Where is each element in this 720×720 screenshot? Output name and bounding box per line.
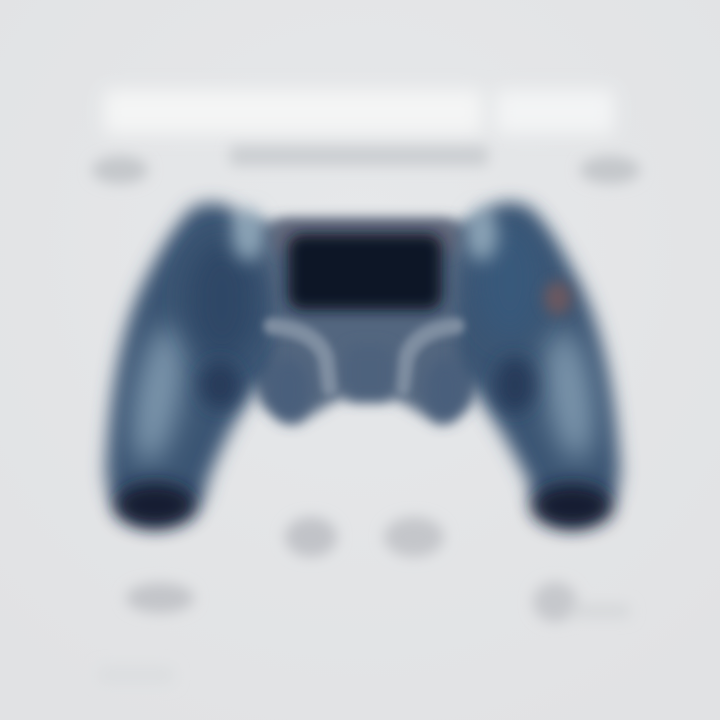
- label: lower centre right: [384, 517, 444, 557]
- label: top left: [92, 156, 148, 184]
- subtitle: [230, 146, 488, 166]
- left thumbstick: [267, 358, 309, 422]
- centre panel: [345, 345, 393, 401]
- left stick housing: [272, 326, 330, 388]
- right thumbstick: [425, 358, 467, 422]
- label: bottom right: [533, 582, 630, 622]
- title: [104, 90, 614, 134]
- right grip: [458, 203, 620, 528]
- label: top right: [580, 156, 640, 184]
- red button accent: [544, 281, 572, 315]
- grip highlight: upper right: [466, 209, 498, 261]
- label: bottom left: [126, 583, 194, 613]
- label: lower centre left: [285, 517, 337, 557]
- left grip: [106, 203, 272, 527]
- touchpad: [274, 220, 456, 310]
- controller body: [240, 222, 490, 424]
- right stick housing: [402, 326, 456, 388]
- grip highlight: upper left: [232, 209, 264, 261]
- footer note: [98, 666, 174, 684]
- controller: [106, 203, 620, 528]
